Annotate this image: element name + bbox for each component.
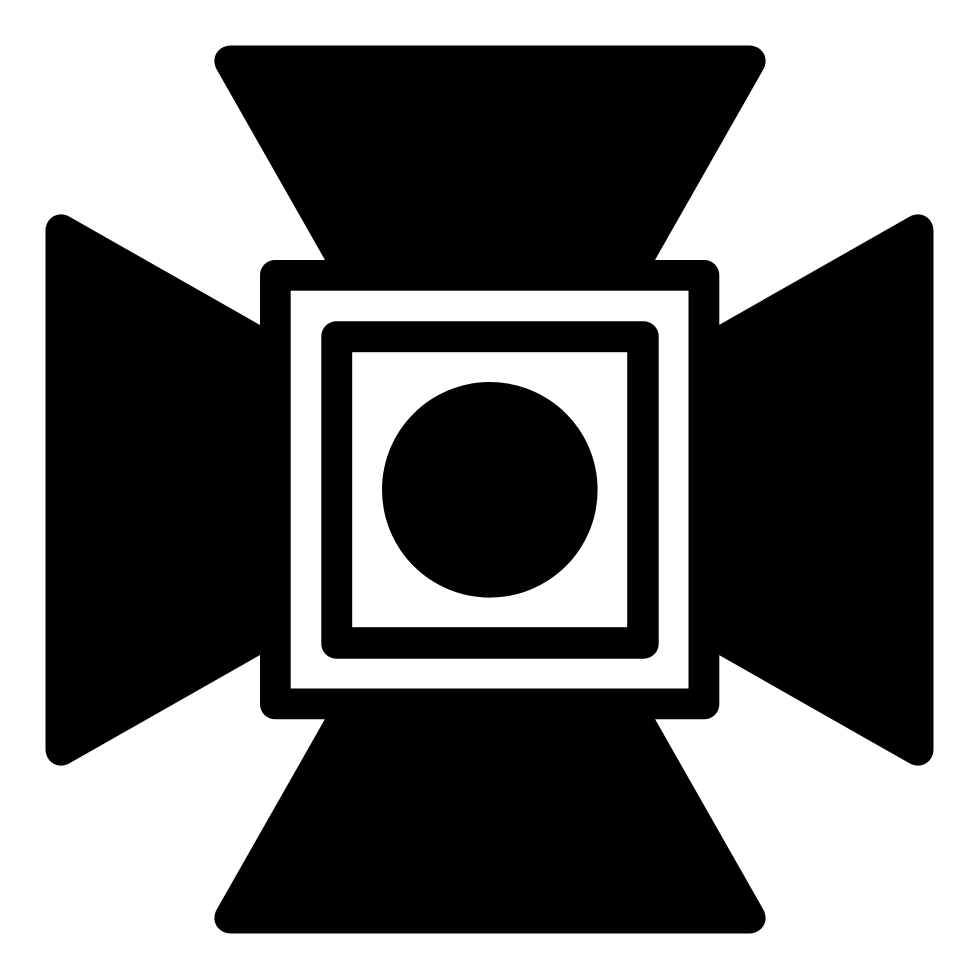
lens circle: [382, 382, 598, 598]
bottom barn door: [214, 719, 766, 934]
left barn door: [46, 214, 260, 766]
right barn door: [719, 214, 934, 766]
inner lens housing: [321, 321, 659, 659]
white lens window: [352, 352, 627, 627]
white frame opening: [291, 291, 688, 688]
top barn door: [214, 46, 766, 260]
outer frame: [260, 260, 719, 719]
